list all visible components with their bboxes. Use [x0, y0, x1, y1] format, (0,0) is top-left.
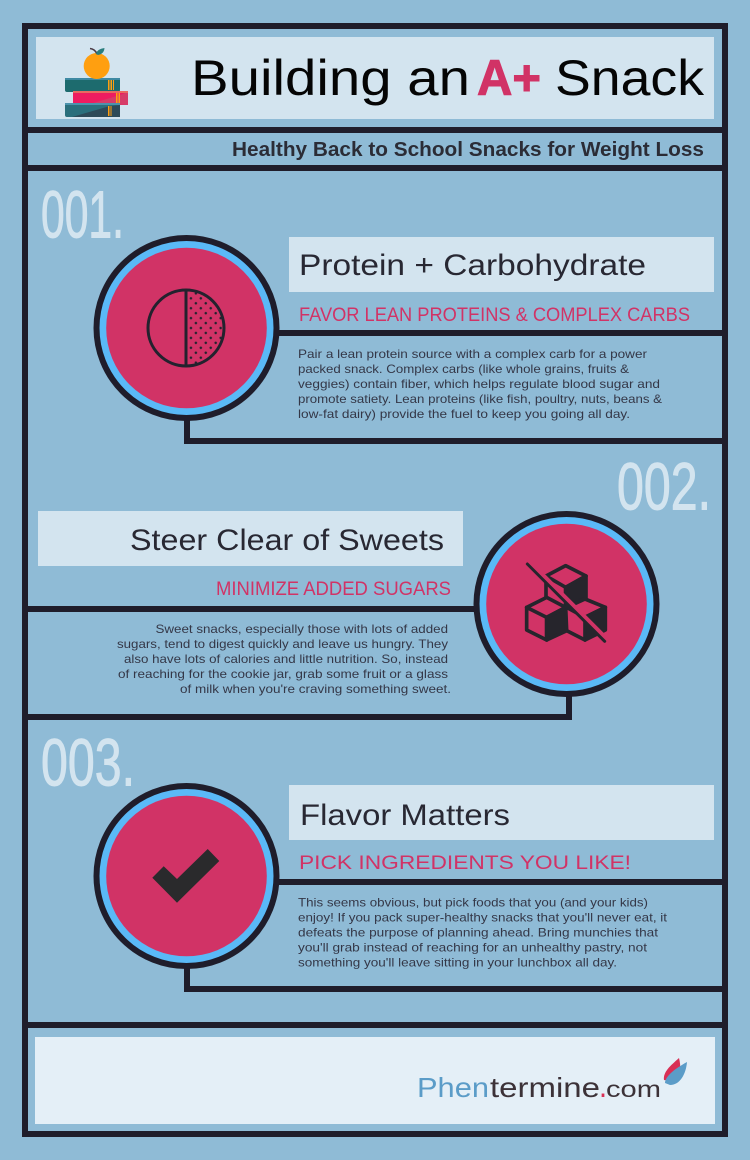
icon: check mark badge: [96, 786, 276, 966]
body text: packed snack. Complex carbs (like whole grains, fruits &: [298, 363, 629, 376]
subtitle: Healthy Back to School Snacks for Weight Loss: [232, 139, 704, 161]
body text: Sweet snacks, especially those with lots of added: [156, 623, 448, 636]
title: A+: [477, 50, 541, 106]
body text: something you'll leave sitting in your lunchbox all day.: [298, 956, 617, 970]
number 002: 002.: [617, 450, 711, 524]
number 003: 003.: [41, 726, 135, 800]
connector lines 003: [187, 882, 725, 989]
card heading: [289, 237, 714, 292]
body text: enjoy! If you pack super-healthy snacks that you'll never eat, it: [298, 912, 668, 924]
body text: [298, 348, 662, 421]
body text: you'll grab instead of reaching for an unhealthy pastry, not: [298, 942, 648, 954]
card heading: Flavor Matters: [300, 799, 510, 832]
body text: promote satiety. Lean proteins (like fish, poultry, nuts, beans &: [298, 393, 662, 406]
body text: [117, 623, 451, 696]
subheading: PICK INGREDIENTS YOU LIKE!: [299, 853, 631, 874]
body text: also have lots of calories and little nutrition. So, instead: [124, 653, 448, 666]
icon: logo leaf: [664, 1058, 687, 1085]
title: Building an: [191, 50, 470, 106]
subheading: FAVOR LEAN PROTEINS & COMPLEX CARBS: [299, 305, 690, 326]
body text: low-fat dairy) provide the fuel to keep you going all day.: [298, 408, 630, 421]
body text: of milk when you're craving something sweet.: [180, 683, 451, 696]
logo wordmark: termine: [490, 1072, 600, 1103]
card heading: Protein + Carbohydrate: [299, 249, 646, 282]
body text: veggies) contain fiber, which helps regulate blood sugar and: [298, 378, 660, 391]
body text: Pair a lean protein source with a complex carb for a power: [298, 348, 647, 361]
icon: sugar cubes crossed out badge: [476, 514, 656, 694]
title: Snack: [555, 50, 705, 106]
section 003: [41, 726, 725, 989]
body text: This seems obvious, but pick foods that you (and your kids): [298, 896, 648, 910]
body text: sugars, tend to digest quickly and leave us hungry. They: [117, 638, 448, 651]
card heading: Steer Clear of Sweets: [130, 524, 444, 557]
logo wordmark: com: [606, 1076, 661, 1102]
icon: half dotted circle badge: [96, 238, 276, 418]
body text: [298, 896, 668, 970]
icon: books and apple: [65, 48, 128, 117]
section 002: [25, 450, 711, 717]
panel: footer logo: [35, 1037, 715, 1124]
card heading: [289, 785, 714, 840]
subheading: MINIMIZE ADDED SUGARS: [216, 579, 451, 600]
panel: title banner: [36, 37, 714, 119]
section 001: [41, 178, 725, 441]
connector lines 002: [25, 609, 569, 717]
logo wordmark: [417, 1068, 661, 1104]
number 001: 001.: [41, 178, 124, 252]
card heading: [38, 511, 463, 566]
title: [191, 50, 705, 106]
logo wordmark: .: [599, 1068, 607, 1104]
connector lines 001: [187, 333, 725, 441]
body text: defeats the purpose of planning ahead. Bring munchies that: [298, 926, 659, 940]
body text: of reaching for the cookie jar, grab some fruit or a glass: [118, 668, 448, 681]
logo wordmark: Phen: [417, 1072, 489, 1103]
